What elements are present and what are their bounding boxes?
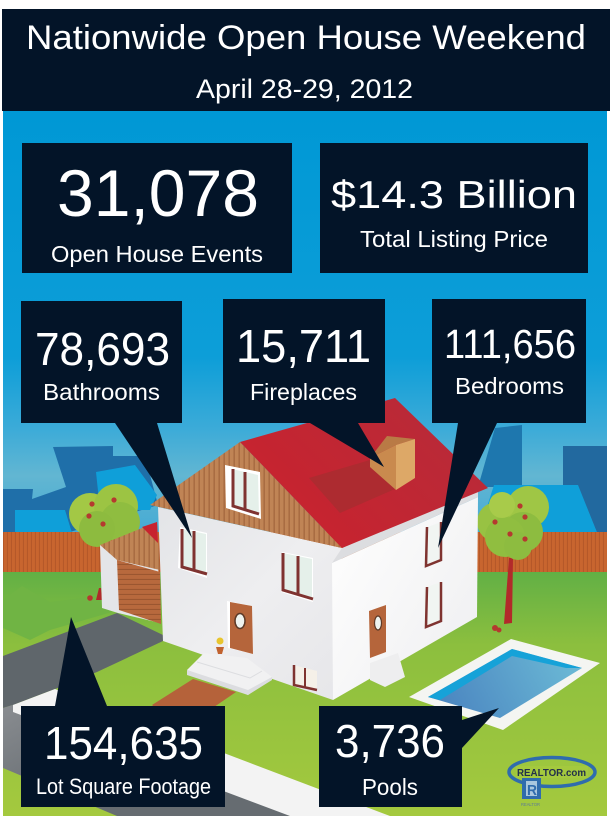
garage bbox=[100, 522, 161, 624]
callout: pools: 3,736 bbox=[335, 715, 445, 767]
logo: REALTOR.com: REALTOR bbox=[521, 802, 541, 807]
callout: bathrooms: Bathrooms bbox=[43, 379, 160, 405]
callout: lot square footage: 154,635 bbox=[44, 717, 203, 769]
callout: lot square footage bbox=[21, 617, 225, 807]
callout: pools: Pools bbox=[362, 774, 418, 800]
chimney bbox=[370, 436, 415, 490]
stat: open house events bbox=[22, 143, 292, 273]
right wall windows bbox=[424, 522, 441, 628]
left wall window bbox=[178, 527, 207, 578]
callout: fireplaces: Fireplaces bbox=[250, 379, 357, 405]
lawn bbox=[3, 572, 607, 816]
callout: fireplaces: 15,711 bbox=[236, 320, 371, 372]
front steps bbox=[187, 653, 272, 695]
roof bbox=[240, 398, 488, 548]
stat: total listing price: $14.3 Billion bbox=[331, 174, 577, 217]
callout: bathrooms bbox=[21, 301, 192, 538]
low window bbox=[293, 665, 317, 690]
logo: REALTOR.com: R bbox=[527, 782, 537, 799]
driveway lower section bbox=[3, 690, 290, 816]
front door bbox=[227, 601, 253, 654]
callout: bedrooms: 111,656 bbox=[444, 321, 576, 367]
title banner bbox=[2, 9, 610, 111]
fence bbox=[3, 532, 607, 572]
tree: left bbox=[69, 484, 140, 601]
gable bbox=[150, 442, 342, 548]
callout: pools bbox=[319, 706, 499, 807]
lawn shadow patch bbox=[3, 586, 112, 640]
skyline buildings bbox=[3, 425, 607, 535]
stat: total listing price: Total Listing Price bbox=[360, 226, 548, 252]
logo: REALTOR.com: REALTOR.com bbox=[517, 767, 586, 779]
callout: lot square footage: Lot Square Footage bbox=[36, 774, 211, 799]
tree: right bbox=[477, 486, 549, 632]
stat: open house events: 31,078 bbox=[57, 156, 259, 230]
stat: open house events: Open House Events bbox=[51, 241, 263, 267]
middle window bbox=[281, 552, 313, 602]
callout: fireplaces bbox=[223, 299, 385, 467]
callout: bathrooms: 78,693 bbox=[35, 323, 170, 375]
driveway bbox=[3, 613, 163, 708]
title: Nationwide Open House Weekend bbox=[26, 19, 586, 57]
wall eave shade bbox=[332, 488, 478, 563]
roof shadow bbox=[309, 460, 395, 513]
background: sky bbox=[3, 111, 607, 536]
callout: bedrooms: Bedrooms bbox=[455, 373, 564, 399]
flower pot bbox=[216, 638, 224, 654]
left wall bbox=[158, 507, 342, 700]
sidewalk bbox=[13, 689, 390, 816]
right wall bbox=[332, 497, 478, 700]
logo: REALTOR.com bbox=[509, 758, 595, 807]
date: April 28-29, 2012 bbox=[196, 74, 413, 104]
house bbox=[100, 398, 488, 700]
side door bbox=[369, 605, 386, 658]
side steps bbox=[370, 653, 405, 687]
brick path bbox=[152, 679, 236, 716]
callout: bedrooms bbox=[432, 299, 586, 548]
stat: total listing price bbox=[320, 143, 588, 273]
pool bbox=[409, 639, 600, 730]
gable window bbox=[225, 465, 261, 519]
